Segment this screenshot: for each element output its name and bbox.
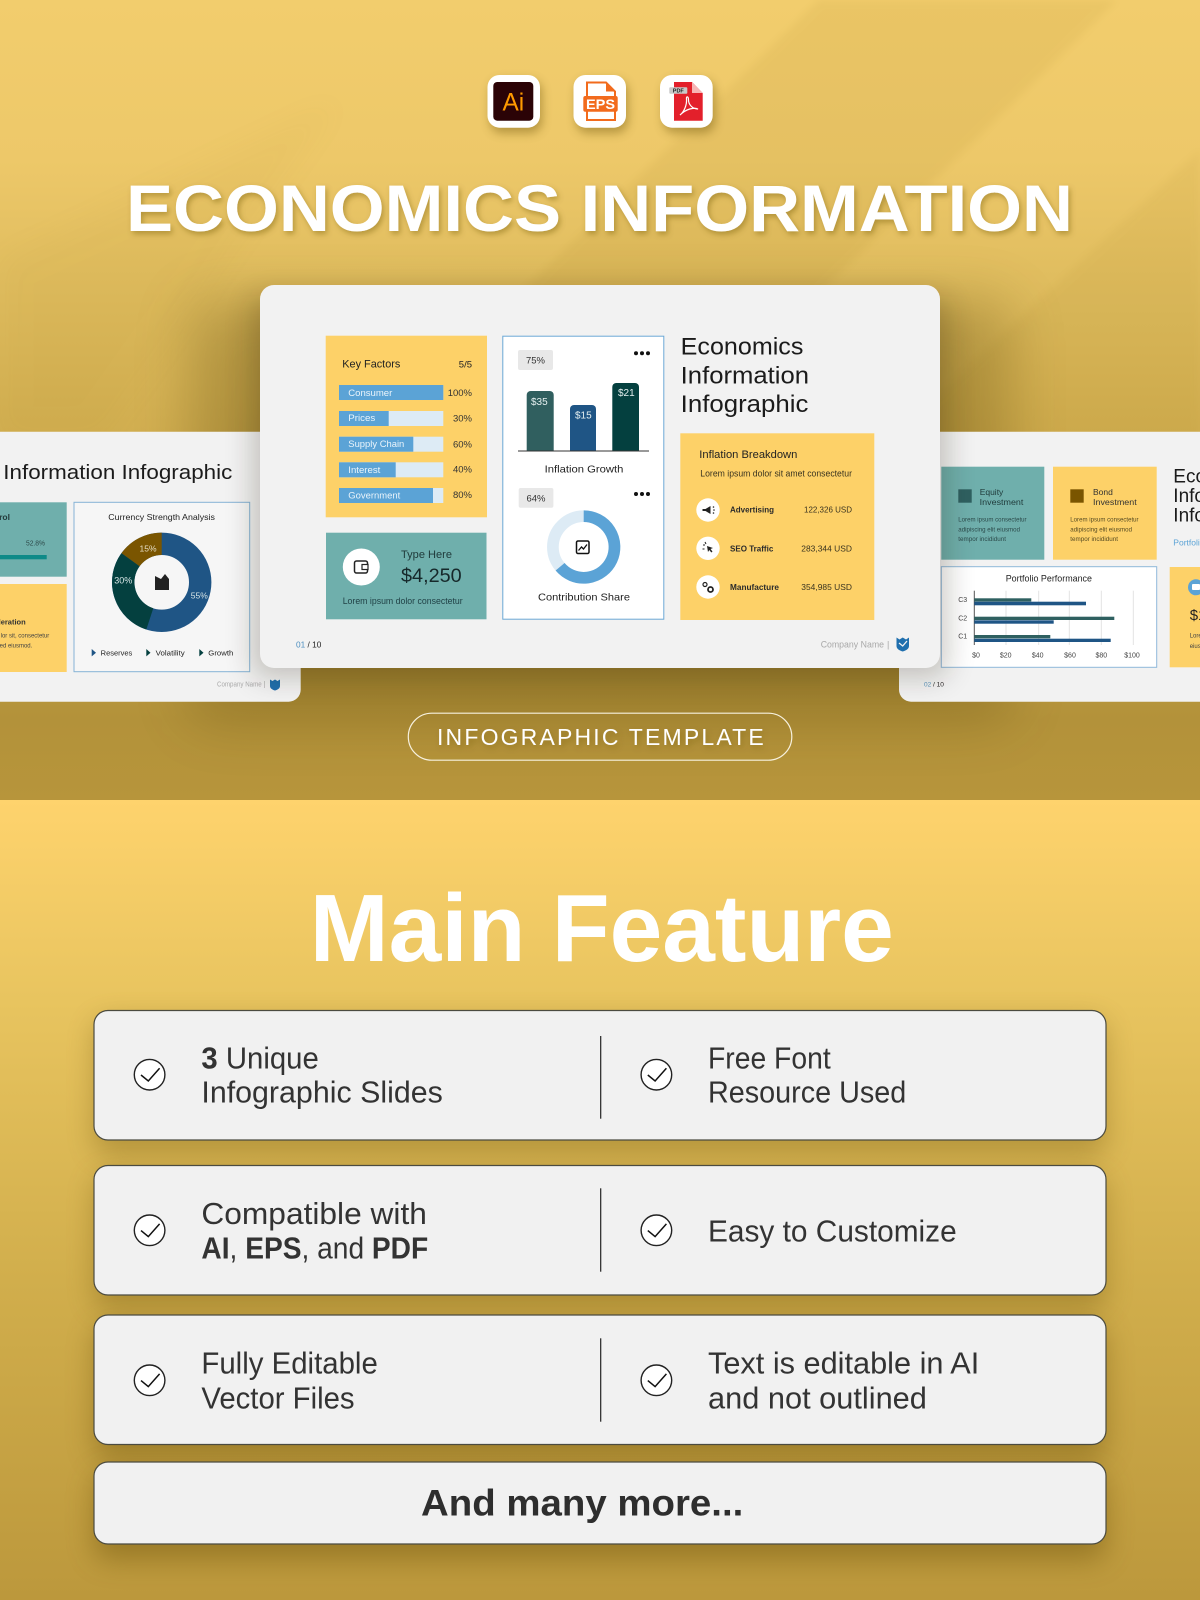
card: equity investment: Equity [980,487,1004,497]
icon: PDF file [660,75,713,128]
donut chart: contribution share [519,488,650,604]
bar chart: inflation growth: Inflation Growth [545,463,624,475]
slide heading: Information Infographic [3,461,232,484]
donut chart: contribution share: Contribution Share [538,592,630,604]
panel: right slide preview [899,432,1200,702]
yellow card: moderation: lor sit, consectetur [1,634,49,640]
slide heading [681,333,809,418]
feature row 3 [94,1315,1106,1444]
company footer: Company Name [821,639,884,649]
progress bars: 80% [453,490,473,501]
card: key factors: 5/5 [459,360,472,371]
company footer: | [887,639,889,649]
slide heading: Information [681,362,809,389]
yellow card: moderation [0,584,67,672]
page number: 01 / 10 [296,639,322,649]
card: key factors [326,336,487,517]
feature: easy to customize: Easy to Customize [708,1213,957,1248]
feature: fully editable vector files: Fully Editable [201,1346,378,1381]
feature: 3 unique infographic slides: 3 Unique [201,1040,319,1075]
feature: compatible with AI, EPS, PDF: AI, EPS, and PDF [201,1231,428,1266]
donut chart: 55% [191,591,208,601]
card: type here amount: Lorem ipsum dolor consectetur [343,596,463,606]
card: yellow stat [1170,567,1200,667]
row: advertising: 122,326 USD [804,504,852,514]
bar chart: portfolio performance: $0 [972,653,980,660]
bar chart: portfolio performance: $40 [1032,653,1044,660]
progress bars: Interest [348,465,381,476]
bar chart: inflation growth: 75% [526,356,546,366]
bar chart: inflation growth: $21 [618,388,635,399]
slide footer: | [264,682,266,689]
icon: PDF file: PDF [673,89,684,95]
feature: text is editable in AI [641,1346,979,1416]
card: bond investment: adipiscing elit eiusmod [1070,527,1132,533]
chart legend: Growth [208,650,233,657]
card: inflation breakdown: Inflation Breakdown [699,449,797,461]
slide heading: Economics [681,333,803,360]
row: manufacture: Manufacture [730,582,779,592]
progress bars: 100% [448,388,473,399]
row: seo traffic: SEO Traffic [730,544,774,554]
progress bars: 40% [453,464,473,476]
badge: infographic template [408,713,792,760]
chart legend [92,649,233,657]
card: inflation breakdown: Lorem ipsum dolor sit amet consectetur [700,469,852,479]
callout: and many more [94,1462,1106,1544]
slide heading: Infographic [681,391,808,418]
bar chart: portfolio performance: C1 [958,634,967,641]
slide heading [1173,466,1200,527]
card: bond investment: tempor incididunt [1070,537,1118,543]
card: type here amount: Type Here [401,549,452,561]
card: inflation breakdown [680,433,874,620]
icon: EPS file [574,75,626,128]
progress bars: Consumer [348,388,392,399]
card: bond investment: Lorem ipsum consectetur [1070,518,1139,524]
icon: Adobe Illustrator [488,75,540,128]
feature: compatible with AI, EPS, PDF: Compatible with [201,1196,427,1231]
progress bars [339,385,473,503]
card: key factors: Key Factors [342,359,401,371]
feature row 2 [94,1166,1106,1295]
bar chart: inflation growth [518,350,650,475]
feature: free font resource used [641,1040,906,1110]
row: manufacture [696,575,852,599]
feature: free font resource used: Free Font [708,1040,831,1075]
chart legend: Volatility [156,650,185,657]
feature: text is editable in AI: Text is editable in AI [708,1346,979,1381]
panel: left slide preview [0,432,301,702]
donut chart: contribution share: 64% [526,494,546,504]
bar chart: portfolio performance: $20 [1000,653,1012,660]
feature: 3 unique infographic slides: Infographic Slides [201,1075,443,1110]
bar chart: portfolio performance [941,567,1157,667]
icon: Adobe Illustrator: Ai [502,89,524,117]
feature row 1 [94,1010,1106,1140]
teal card: control: 52.8% [26,541,45,548]
bar chart: portfolio performance: C3 [958,597,967,604]
chart legend: Reserves [101,650,133,657]
bar chart: portfolio performance: $80 [1095,653,1107,660]
icon: wallet [343,548,380,586]
bottom section background [0,800,1200,1600]
feature: text is editable in AI: and not outlined [708,1381,927,1416]
bar chart: inflation growth: $35 [531,397,548,408]
heading: main feature: Main Feature [310,875,894,982]
row: manufacture: 354,985 USD [801,582,852,592]
card: equity investment: Investment [980,497,1024,507]
callout: and many more: And many more... [421,1483,743,1524]
page number: 02 / 10 [924,682,944,689]
bar chart: portfolio performance: Portfolio Performance [1006,574,1092,584]
bar chart: portfolio performance: $100 [1124,653,1140,660]
slide footer: Company Name [217,682,262,689]
feature: fully editable vector files: Vector Files [201,1381,355,1416]
panel: currency strength analysis: Currency Strength Analysis [108,512,215,522]
company footer [821,638,909,652]
feature: 3 unique infographic slides [134,1040,443,1110]
card: type here amount [326,533,486,619]
bar chart: inflation growth: $15 [575,410,592,421]
card: equity investment: Lorem ipsum consectetur [958,518,1027,524]
feature: fully editable vector files [134,1346,378,1416]
donut chart [114,544,208,621]
progress bars: 60% [453,440,473,450]
yellow card: moderation: ed eiusmod. [0,643,33,649]
card: equity investment: adipiscing elit eiusmod [958,527,1020,533]
feature: free font resource used: Resource Used [708,1075,906,1110]
slide footer [217,680,280,690]
panel: currency strength analysis [74,502,250,672]
row: seo traffic [696,537,852,560]
title: ECONOMICS INFORMATION [126,171,1073,245]
progress bars: Prices [348,413,376,424]
badge: infographic template: INFOGRAPHIC TEMPLATE [437,724,764,750]
format icons row [488,75,715,133]
card: bond investment: Bond [1093,487,1113,497]
teal card: control [0,502,67,577]
top section background [0,0,1200,800]
main slide shadow [252,296,948,678]
card: bond investment: Investment [1093,497,1137,507]
row: advertising [696,498,852,522]
donut chart: 30% [114,576,132,586]
progress bars: Government [348,490,401,502]
icon: EPS file: EPS [586,96,615,112]
card: type here amount: $4,250 [401,566,462,587]
panel: main slide [260,285,940,668]
progress bars: Supply Chain [348,439,404,450]
feature: compatible with AI, EPS, PDF [134,1196,428,1266]
bar chart: portfolio performance: C2 [958,615,967,622]
row: seo traffic: 283,344 USD [801,544,852,554]
progress bars: 30% [453,414,473,424]
card: equity investment: tempor incididunt [958,537,1006,543]
card: bond investment [1053,467,1157,560]
bar chart: portfolio performance: $60 [1064,653,1076,660]
row: advertising: Advertising [730,504,774,514]
donut chart: 15% [139,544,157,554]
panel: charts [503,336,664,619]
card: equity investment [941,467,1044,560]
